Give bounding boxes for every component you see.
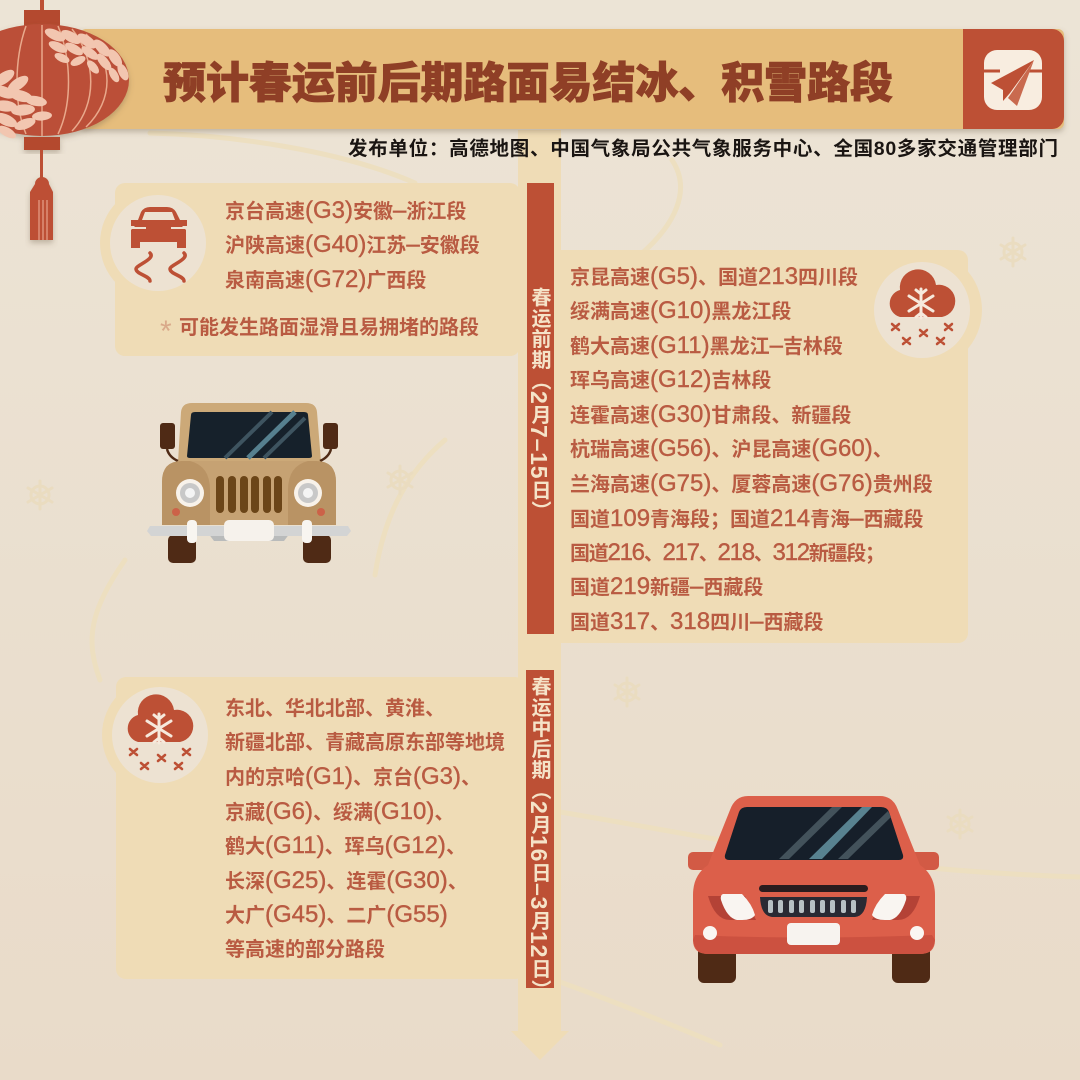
route list: 杭瑞高速(G56)、沪昆高速(G60)、 — [570, 435, 893, 462]
timeline arrow band — [511, 130, 569, 1060]
route list: 国道219新疆–西藏段 — [570, 573, 763, 600]
panel: early period icing — [550, 250, 982, 643]
icon: snow cloud — [874, 262, 970, 358]
logo box — [963, 29, 1064, 129]
decorative snowflakes — [28, 238, 1025, 838]
route list: 京昆高速(G5)、国道213四川段 — [570, 263, 858, 290]
route list: 新疆北部、青藏高原东部等地境 — [225, 730, 505, 754]
note — [160, 315, 479, 348]
route list — [570, 263, 933, 635]
route list: 泉南高速(G72)广西段 — [225, 266, 426, 293]
title banner — [80, 29, 1064, 129]
route list: 鹤大高速(G11)黑龙江–吉林段 — [570, 332, 843, 359]
note: * — [160, 315, 172, 348]
illustration: red car — [688, 796, 939, 983]
timeline bar: early period: 春运前期（ 2 月 7–15 日） — [526, 287, 552, 521]
icon: skidding car — [110, 195, 206, 291]
route list: 鹤大(G11)、珲乌(G12)、 — [225, 832, 466, 859]
route list: 连霍高速(G30)甘肃段、新疆段 — [570, 401, 851, 428]
timeline bar: mid-late period: 春运中后期（ 2 月 16 日 –3 月 12 日） — [526, 676, 552, 1000]
route list: 沪陕高速(G40)江苏–安徽段 — [225, 231, 480, 258]
route list: 京台高速(G3)安徽–浙江段 — [225, 197, 466, 224]
route list: 内的京哈(G1)、京台(G3)、 — [225, 763, 481, 790]
timeline bar: early period — [526, 183, 554, 634]
route list: 大广(G45)、二广(G55) — [225, 901, 448, 928]
route list: 兰海高速(G75)、厦蓉高速(G76)贵州段 — [570, 470, 933, 497]
title: 预计春运前后期路面易结冰、积雪路段 — [163, 59, 893, 108]
route list: 东北、华北北部、黄淮、 — [225, 696, 445, 720]
lantern leaves — [0, 26, 131, 141]
route list: 绥满高速(G10)黑龙江段 — [570, 297, 791, 324]
route list: 国道317、318四川–西藏段 — [570, 608, 823, 635]
note: 可能发生路面湿滑且易拥堵的路段 — [179, 315, 479, 339]
publisher line: 发布单位：高德地图、中国气象局公共气象服务中心、全国80多家交通管理部门 — [348, 137, 1058, 160]
icon: snow cloud — [112, 687, 208, 783]
panel: early period congestion — [100, 183, 520, 356]
lantern — [0, 0, 131, 240]
route list: 长深(G25)、连霍(G30)、 — [225, 867, 468, 894]
panel: mid-late period — [102, 677, 525, 979]
route list — [225, 197, 480, 293]
route list: 等高速的部分路段 — [225, 937, 385, 961]
route list — [225, 696, 505, 961]
illustration: jeep — [147, 403, 351, 563]
route list: 珲乌高速(G12)吉林段 — [570, 366, 771, 393]
route list: 国道109青海段；国道214青海–西藏段 — [570, 505, 923, 532]
route list: 国道216、217、218、312新疆段； — [570, 539, 885, 566]
route list: 京藏(G6)、绥满(G10)、 — [225, 798, 454, 825]
